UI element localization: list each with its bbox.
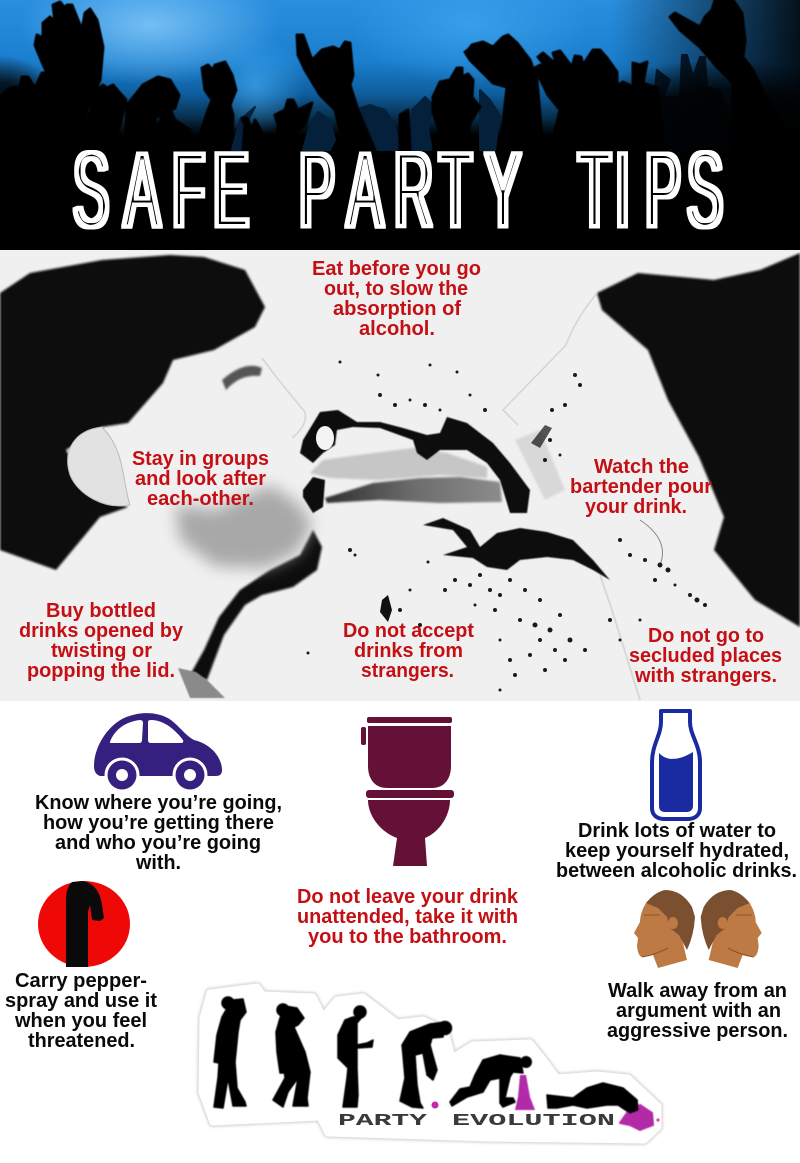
- sticker caption: EVOLUTION: [452, 1112, 615, 1131]
- man's hair: [0, 255, 265, 570]
- man's mouth: [303, 477, 325, 513]
- tip: stay in groups: and look after: [135, 467, 266, 490]
- tip: stay in groups: each-other.: [147, 487, 254, 510]
- figure 6 collapsed: [547, 1083, 660, 1130]
- icon: toilet: [361, 717, 454, 866]
- tip: watch the bartender: [570, 455, 712, 518]
- tip: drink lots of water: between alcoholic drinks.: [556, 859, 797, 882]
- tip: buy bottled drinks: drinks opened by: [19, 619, 184, 642]
- figure 2 drinking, stooping: [273, 1004, 310, 1107]
- tip: do not leave your drink: you to the bathroom.: [308, 925, 507, 948]
- figure 4 bent over: [400, 1022, 452, 1108]
- tip: buy bottled drinks: popping the lid.: [27, 659, 175, 682]
- tip: walk away from argument: argument with an: [616, 999, 781, 1022]
- tip: know where you're going: Know where you’re going,: [35, 791, 282, 814]
- figure 1 drinking: [214, 997, 246, 1108]
- tip: carry pepper spray: threatened.: [28, 1029, 135, 1052]
- jaw shadow: [190, 530, 322, 680]
- foreground hands: [0, 0, 800, 150]
- tip: do not accept drinks: drinks from: [354, 639, 463, 662]
- tip: stay in groups: Stay in groups: [132, 447, 269, 470]
- tip: secluded places: with strangers.: [634, 664, 777, 687]
- woman's lips: [515, 430, 565, 500]
- woman's hair: [597, 253, 800, 627]
- tip: drink lots of water: Drink lots of water to: [578, 819, 776, 842]
- tip: carry pepper spray: spray and use it: [5, 989, 157, 1012]
- figure 5 crawling, vomiting: [450, 1055, 535, 1110]
- icon: two heads facing away: [634, 890, 762, 968]
- tip: watch the bartender: your drink.: [585, 495, 687, 518]
- tip: secluded places: Do not go to: [648, 624, 764, 647]
- tip: secluded places: secluded places: [629, 644, 782, 667]
- tip: eat before you go out: [312, 257, 481, 340]
- tip: do not leave your drink: unattended, take it with: [297, 905, 518, 928]
- icon: bottle of water: [652, 711, 700, 819]
- tip: know where you're going: and who you’re going: [55, 831, 261, 854]
- tip: watch the bartender: bartender pour: [570, 475, 712, 498]
- sticker: party evolution: [202, 987, 660, 1140]
- tip: stay in groups: [132, 447, 269, 510]
- tip: eat before you go out: Eat before you go: [312, 257, 481, 280]
- tip: do not accept drinks: strangers.: [361, 659, 454, 682]
- figure 3 stooped: [338, 1006, 373, 1107]
- tip: eat before you go out: alcohol.: [359, 317, 435, 340]
- tip: know where you're going: how you’re getting there: [43, 811, 274, 834]
- tip: do not leave your drink: Do not leave your drink: [297, 885, 519, 908]
- tip: do not accept drinks: [343, 619, 474, 682]
- stream of liquid: [310, 448, 487, 480]
- tip: drink lots of water: [556, 819, 797, 882]
- liquid droplets: [306, 360, 707, 692]
- sticker caption: [338, 1112, 615, 1131]
- tip: secluded places: [629, 624, 782, 687]
- tip: know where you're going: with.: [135, 851, 181, 874]
- banner: concert crowd: [0, 0, 800, 250]
- man's beard: [175, 485, 312, 568]
- tip: eat before you go out: out, to slow the: [324, 277, 468, 300]
- tip: walk away from argument: aggressive person.: [607, 1019, 788, 1042]
- dark wine splash: [300, 410, 610, 622]
- tip: carry pepper spray: Carry pepper-: [15, 969, 147, 992]
- icon: pepper spray: [38, 881, 130, 967]
- tip: watch the bartender: Watch the: [594, 455, 689, 478]
- woman's face outline: [503, 293, 597, 425]
- tip: carry pepper spray: when you feel: [14, 1009, 147, 1032]
- dim background hands: [232, 55, 740, 150]
- title: SAFEPARTYTIPS: [73, 131, 723, 251]
- tip: know where you're going: [35, 791, 282, 874]
- panel: photo of two people spitting drink: [0, 250, 800, 701]
- tip: carry pepper spray: [5, 969, 157, 1052]
- sticker caption: PARTY: [338, 1112, 428, 1131]
- icon: car: [94, 713, 222, 792]
- tip: eat before you go out: absorption of: [333, 297, 461, 320]
- tip: buy bottled drinks: twisting or: [51, 639, 152, 662]
- tip: do not leave your drink: [297, 885, 519, 948]
- tip: drink lots of water: keep yourself hydrated,: [565, 839, 789, 862]
- tip: walk away from argument: [607, 979, 788, 1042]
- man's eye: [222, 366, 262, 390]
- tip: walk away from argument: Walk away from an: [608, 979, 787, 1002]
- pink drop: [432, 1102, 438, 1108]
- tip: do not accept drinks: Do not accept: [343, 619, 474, 642]
- tip: buy bottled drinks: [19, 599, 184, 682]
- man's ear: [68, 427, 130, 506]
- tip: buy bottled drinks: Buy bottled: [46, 599, 156, 622]
